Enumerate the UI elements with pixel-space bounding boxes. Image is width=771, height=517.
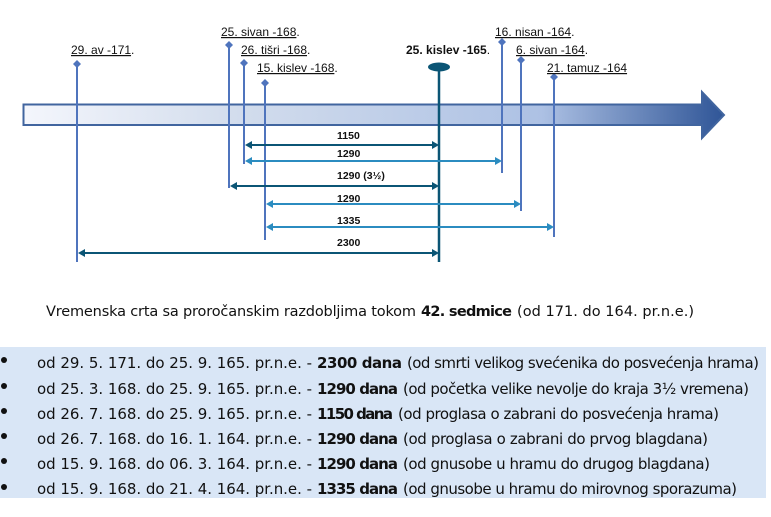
period labels: 1335	[337, 215, 361, 227]
date labels	[71, 25, 627, 75]
row 6: 1335 dana	[317, 480, 398, 498]
date markers	[73, 38, 558, 262]
row 6	[37, 480, 737, 498]
row 5: 1290 dana	[317, 455, 398, 473]
label: 16. nisan -164: 16. nisan -164.	[495, 25, 574, 39]
marker: 25. sivan -168	[225, 41, 233, 188]
period labels	[337, 130, 385, 249]
label: 15. kislev -168: 15. kislev -168.	[257, 61, 338, 75]
row 3	[37, 405, 719, 423]
row 2: 1290 dana	[317, 380, 398, 398]
bullets	[1, 357, 7, 490]
arrow: 1335	[266, 223, 554, 231]
label: 25. kislev -165: 25. kislev -165.	[406, 43, 490, 57]
period labels: 1290	[337, 148, 361, 160]
row 4	[37, 430, 708, 448]
period labels: 2300	[337, 237, 361, 249]
row 2: (od početka velike nevolje do kraja 3½ vremena)	[403, 380, 749, 398]
row 3: (od proglasa o zabrani do posvećenja hrama)	[398, 405, 719, 423]
row 4: od 26. 7. 168. do 16. 1. 164. pr.n.e. -	[37, 430, 312, 448]
arrow: 2300	[78, 249, 439, 257]
arrow: 1150	[245, 141, 439, 149]
arrow: 1290 to sivan	[266, 200, 521, 208]
arrow: 1290 (3.5)	[230, 182, 439, 190]
row 6: od 15. 9. 168. do 21. 4. 164. pr.n.e. -	[37, 480, 312, 498]
panel: list of periods	[0, 347, 766, 498]
row 4: (od proglasa o zabrani do prvog blagdana)	[403, 430, 708, 448]
caption: Vremenska crta sa proročanskim razdobljima tokom	[46, 304, 416, 320]
label: 25. sivan -168: 25. sivan -168.	[221, 25, 300, 39]
row 4: 1290 dana	[317, 430, 398, 448]
label: 21. tamuz -164: 21. tamuz -164	[547, 61, 627, 75]
row 3: 1150 dana	[317, 405, 393, 423]
caption: (od 171. do 164. pr.n.e.)	[517, 304, 694, 320]
row 5	[37, 455, 710, 473]
period labels: 1150	[337, 130, 360, 142]
row 2: od 25. 3. 168. do 25. 9. 165. pr.n.e. -	[37, 380, 312, 398]
row 1: od 29. 5. 171. do 25. 9. 165. pr.n.e. -	[37, 354, 312, 372]
marker: 29. av -171	[73, 60, 81, 262]
row 5: (od gnusobe u hramu do drugog blagdana)	[403, 455, 710, 473]
timeline arrow	[24, 92, 724, 138]
arrow: 1290 to nisan	[245, 157, 502, 165]
period labels: 1290	[337, 193, 361, 205]
period arrows	[78, 141, 554, 257]
label: 26. tisri -168: 26. tišri -168.	[241, 43, 310, 57]
row 6: (od gnusobe u hramu do mirovnog sporazuma)	[403, 480, 737, 498]
row 5: od 15. 9. 168. do 06. 3. 164. pr.n.e. -	[37, 455, 312, 473]
row 1: 2300 dana	[317, 354, 402, 372]
row 3: od 26. 7. 168. do 25. 9. 165. pr.n.e. -	[37, 405, 312, 423]
caption: 42. sedmice	[421, 304, 512, 320]
period labels: 1290 (3½)	[337, 170, 385, 182]
row 1: (od smrti velikog svećenika do posvećenja hrama)	[407, 354, 759, 372]
label: 6. sivan -164: 6. sivan -164.	[516, 43, 588, 57]
row 2	[37, 380, 749, 398]
marker: 26. tisri -168	[240, 59, 248, 164]
marker: 21. tamuz -164	[550, 73, 558, 237]
label: 29. av -171: 29. av -171.	[71, 43, 134, 57]
marker: 25. kislev -165	[428, 62, 450, 262]
caption	[46, 304, 694, 320]
marker: 6. sivan -164	[517, 56, 525, 211]
marker: 16. nisan -164	[498, 38, 506, 173]
marker: 15. kislev -168	[261, 79, 269, 240]
row 1	[37, 354, 759, 372]
